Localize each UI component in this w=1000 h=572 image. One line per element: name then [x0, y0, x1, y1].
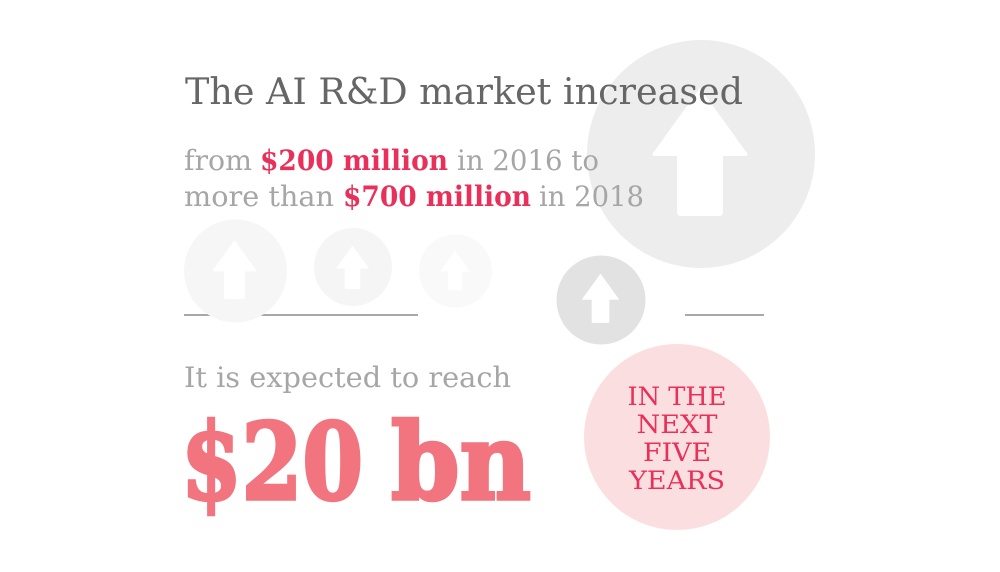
divider lines [184, 314, 764, 316]
text block: 2016 to 2018 growth: $700 million [343, 180, 531, 213]
text block: 2016 to 2018 growth: $200 million [260, 144, 448, 177]
icon: large up arrow in circle [587, 40, 815, 268]
text block: 2016 to 2018 growth: more than [184, 180, 334, 213]
headline figure: $20 bn [181, 399, 531, 524]
title: The AI R&D market increased [185, 72, 743, 113]
text block: 2016 to 2018 growth: in 2018 [539, 180, 644, 213]
callout: in the next five years: IN THE [628, 382, 726, 411]
callout: in the next five years [584, 344, 770, 530]
headline figure: $20 bn: bn [391, 399, 531, 524]
icon: small up arrow circle 3 [419, 234, 492, 308]
headline figure: $20 bn: $20 [181, 399, 363, 524]
callout: in the next five years: YEARS [628, 466, 725, 495]
icon: small up arrow circle 1 [184, 220, 287, 322]
text: expected to reach: It is expected to reach [184, 361, 511, 394]
icon: medium up arrow circle [556, 256, 646, 344]
callout: in the next five years: NEXT [636, 410, 718, 439]
icon: small up arrow circle 2 [314, 228, 392, 306]
text block: 2016 to 2018 growth: in 2016 to [457, 144, 599, 177]
text block: 2016 to 2018 growth: from [184, 144, 252, 177]
callout: in the next five years: FIVE [643, 438, 711, 467]
text block: 2016 to 2018 growth [184, 144, 644, 213]
